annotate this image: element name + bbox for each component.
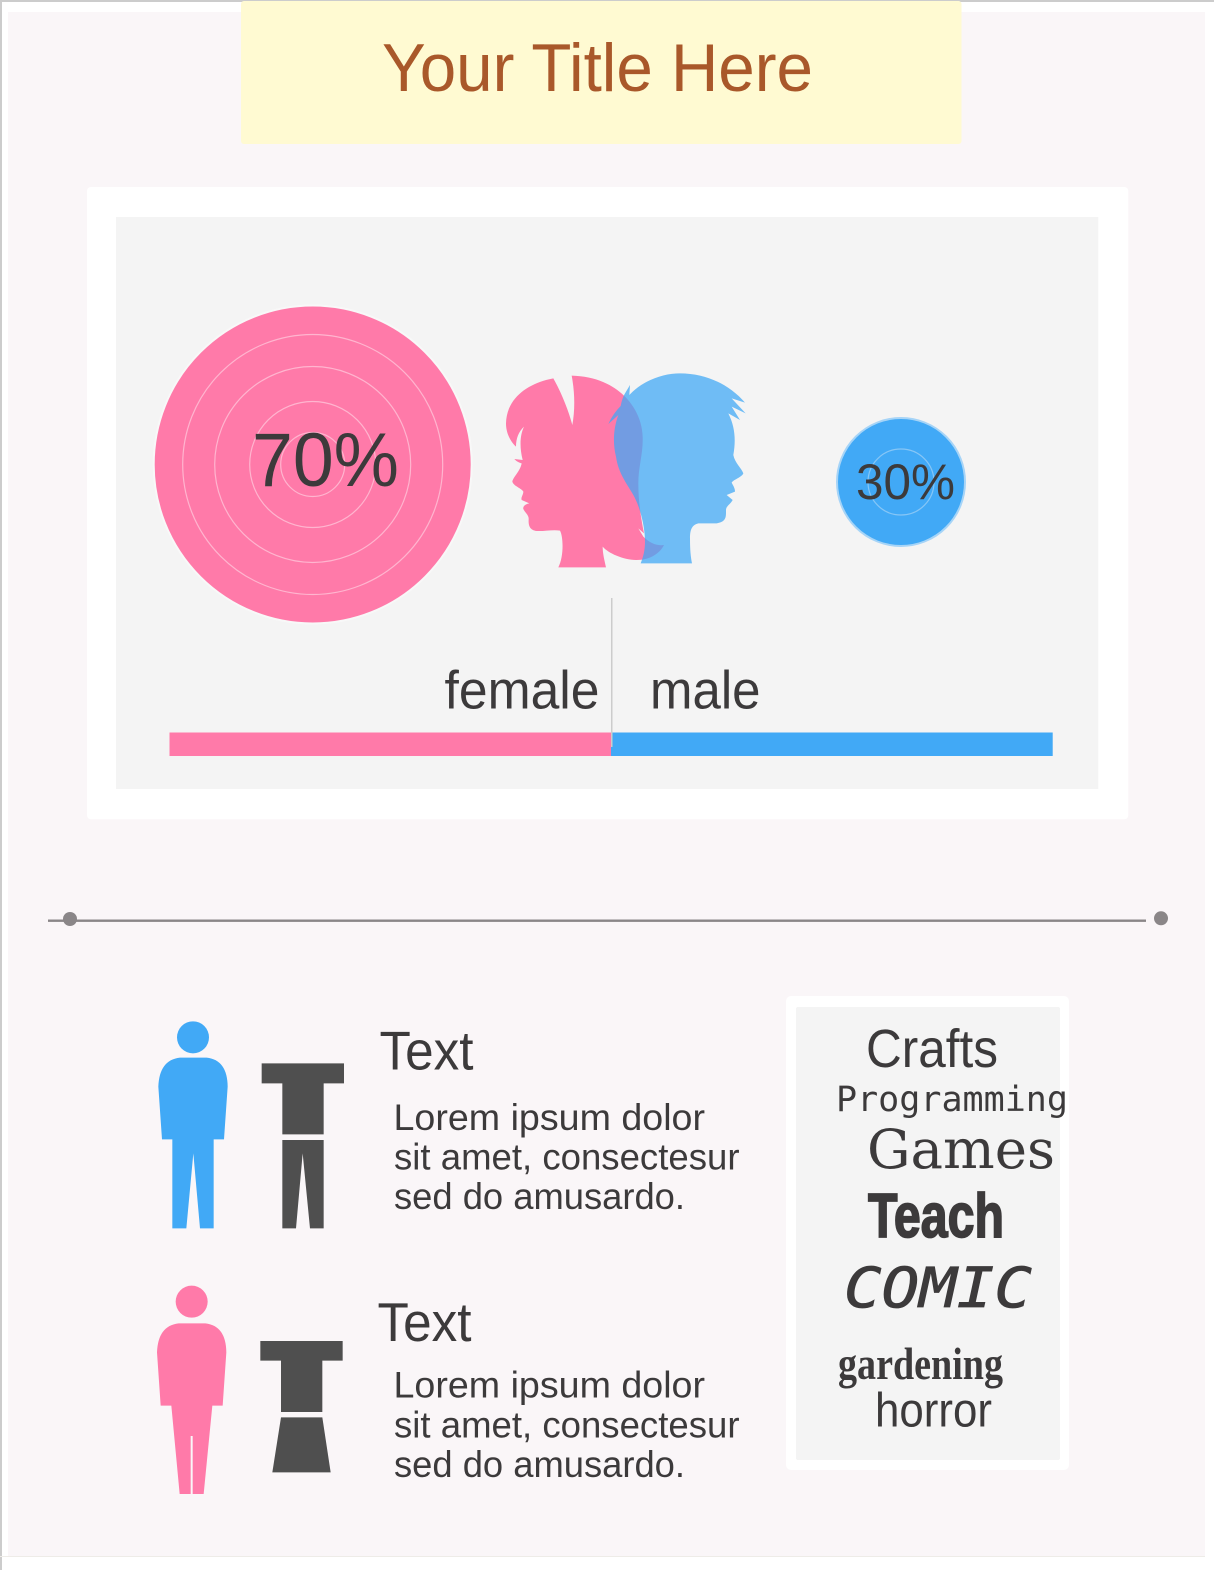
word: gardening: gardening [838,1339,1003,1389]
label: male: male [650,660,760,720]
title banner: Your Title Here [382,30,813,106]
icon: shirt and skirt [260,1341,343,1472]
bar chart: female and male share [170,598,1053,756]
chart: male 30% circle: 30% [856,454,955,510]
title banner [241,1,962,144]
word: Programming: Programming [836,1080,1068,1120]
panel: word cloud [786,996,1069,1470]
word: Teach: Teach [868,1182,1004,1251]
text block: male: Lorem ipsum dolor [394,1097,705,1138]
word: Games: Games [867,1118,1055,1181]
label: female: female [444,660,600,720]
text block: female [378,1291,740,1485]
panel: gender split [87,187,1128,819]
text block: female: Lorem ipsum dolor [394,1364,705,1406]
word: horror: horror [875,1384,992,1438]
text block: female: sed do amusardo. [394,1444,685,1485]
icon: shirt and trousers [262,1063,344,1228]
divider line with dots [48,911,1168,926]
chart: female 70% circle [154,306,472,624]
chart: male 30% circle [837,418,965,546]
word: Crafts: Crafts [866,1019,998,1079]
word: COMIC: COMIC [844,1256,1032,1320]
text block: female: Text [378,1291,472,1353]
chart: female 70% circle: 70% [252,418,399,503]
icon: male figure [158,1021,228,1228]
icon: female and male head silhouettes [506,373,746,567]
text block: male: sit amet, consectesur [394,1136,740,1178]
text block: male: Text [380,1019,474,1081]
text block: female: sit amet, consectesur [394,1404,740,1446]
icon: female figure [157,1286,226,1494]
text block: male [380,1019,740,1217]
text block: male: sed do amusardo. [394,1176,685,1217]
